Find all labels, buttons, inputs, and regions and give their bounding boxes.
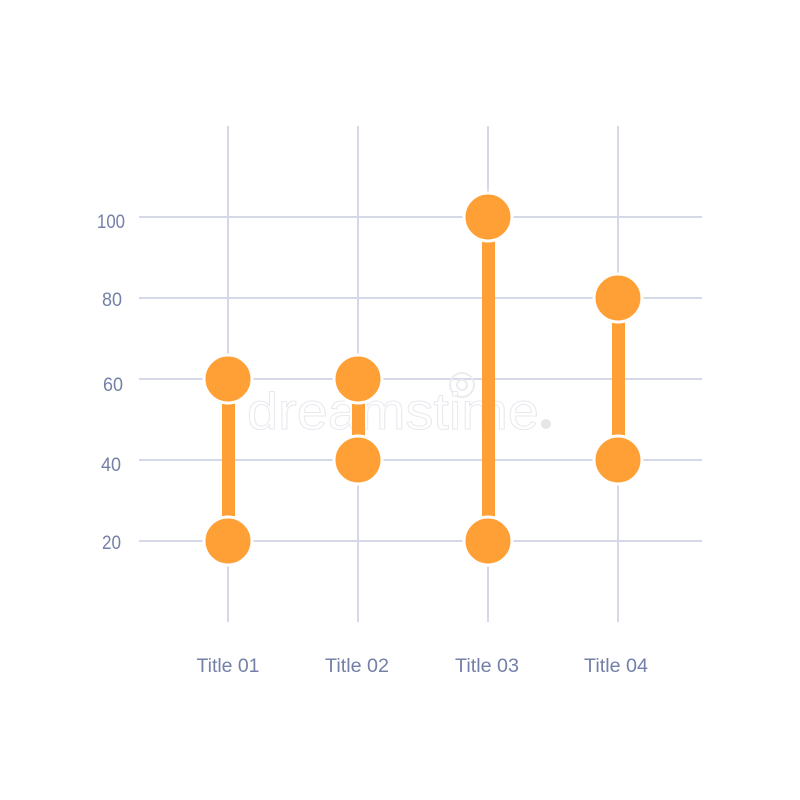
x axis labels: Title 02 [325,656,389,677]
y axis labels: 100 [97,212,125,233]
x axis labels: Title 03 [455,656,519,677]
x axis labels [196,656,648,677]
range: Title 02 [334,355,382,484]
x axis labels: Title 01 [196,656,260,677]
y axis labels [97,212,125,554]
y axis labels: 20 [102,533,121,554]
range: Title 04 [594,274,642,484]
y axis labels: 80 [102,290,122,311]
y axis labels: 60 [103,375,123,396]
range: Title 01 [204,355,252,565]
watermark: dreamstime [247,383,539,441]
x axis labels: Title 04 [584,656,648,677]
range: Title 03 [464,193,512,565]
y axis labels: 40 [101,455,121,476]
